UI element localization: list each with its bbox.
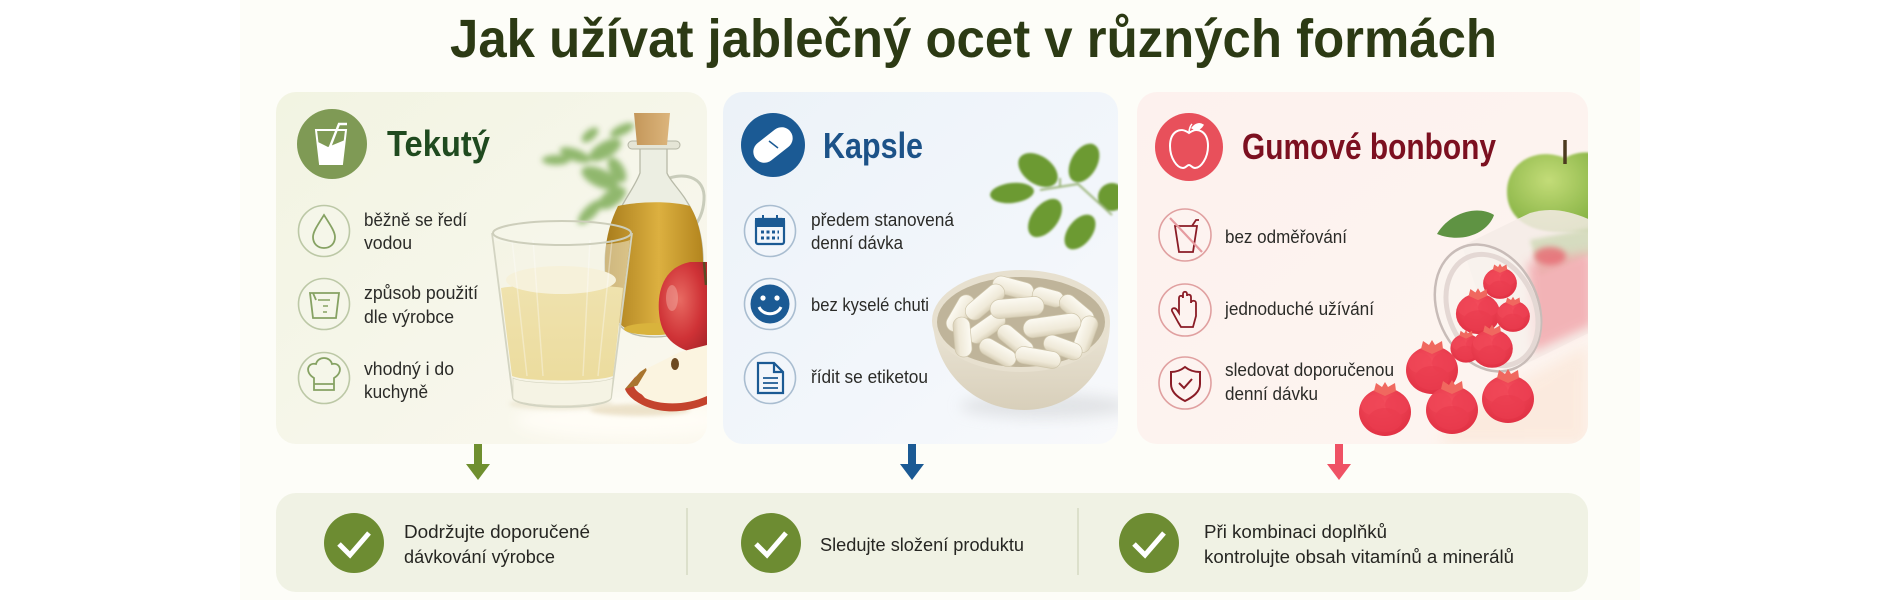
heading: Tekutý: Tekutý <box>387 123 490 164</box>
panel: capsules <box>723 92 1130 444</box>
item: no measuring <box>1159 209 1347 261</box>
item: no sour taste <box>744 278 929 330</box>
item: use per manufacturer: způsob použití <box>364 283 478 303</box>
item: watch daily dose <box>1159 357 1394 409</box>
item: preset daily dose: denní dávka <box>811 233 904 253</box>
arrow: capsules <box>900 444 924 480</box>
item: easy use: jednoduché užívání <box>1224 299 1374 319</box>
item: no measuring: bez odměřování <box>1225 227 1347 247</box>
item: preset daily dose: předem stanovená <box>811 210 955 230</box>
item: dilute with water: běžně se ředí <box>364 210 467 230</box>
item: dilute with water <box>298 206 467 256</box>
tip: combining supplements <box>1119 513 1514 573</box>
tip: composition: Sledujte složení produktu <box>820 535 1024 555</box>
panel: gummies <box>1137 92 1600 444</box>
photo: green apple, jar and gummies <box>1359 140 1600 444</box>
item: watch daily dose: sledovat doporučenou <box>1225 360 1394 380</box>
item: kitchen use: vhodný i do <box>364 359 454 379</box>
item: use per manufacturer <box>298 278 478 330</box>
item: use per manufacturer: dle výrobce <box>364 307 454 327</box>
icon: capsule <box>741 113 805 177</box>
item: dilute with water: vodou <box>364 233 412 253</box>
background <box>240 0 1640 600</box>
icon: liquid glass <box>297 109 367 179</box>
item: follow label <box>744 352 928 404</box>
heading: Gumové bonbony: Gumové bonbony <box>1242 126 1496 167</box>
arrow: gummies <box>1327 444 1351 480</box>
tip: dosage: Dodržujte doporučené <box>404 522 590 542</box>
heading: Kapsle: Kapsle <box>823 125 923 166</box>
tip: composition <box>741 513 1024 573</box>
item: easy use <box>1159 284 1374 336</box>
icon: apple <box>1155 113 1223 181</box>
arrow: liquid <box>466 444 490 480</box>
item: no sour taste: bez kyselé chuti <box>811 295 929 315</box>
tip: dosage: dávkování výrobce <box>404 547 555 567</box>
item: watch daily dose: denní dávku <box>1225 384 1318 404</box>
item: kitchen use: kuchyně <box>364 382 428 402</box>
item: kitchen use <box>298 352 454 404</box>
panel: liquid <box>276 92 735 444</box>
panel: recommendations <box>276 493 1588 592</box>
item: follow label: řídit se etiketou <box>811 367 928 387</box>
capsules <box>943 274 1100 370</box>
tip: combining supplements: Při kombinaci doplňků <box>1204 522 1387 542</box>
title: Jak užívat jablečný ocet v různých formách <box>450 9 1497 69</box>
tip: dosage <box>324 513 590 573</box>
item: preset daily dose <box>744 206 955 256</box>
photo: bowl of capsules and leaves <box>932 138 1130 418</box>
tip: combining supplements: kontrolujte obsah vitamínů a minerálů <box>1204 547 1514 567</box>
photo: vinegar bottle, glass and apple <box>492 113 735 438</box>
